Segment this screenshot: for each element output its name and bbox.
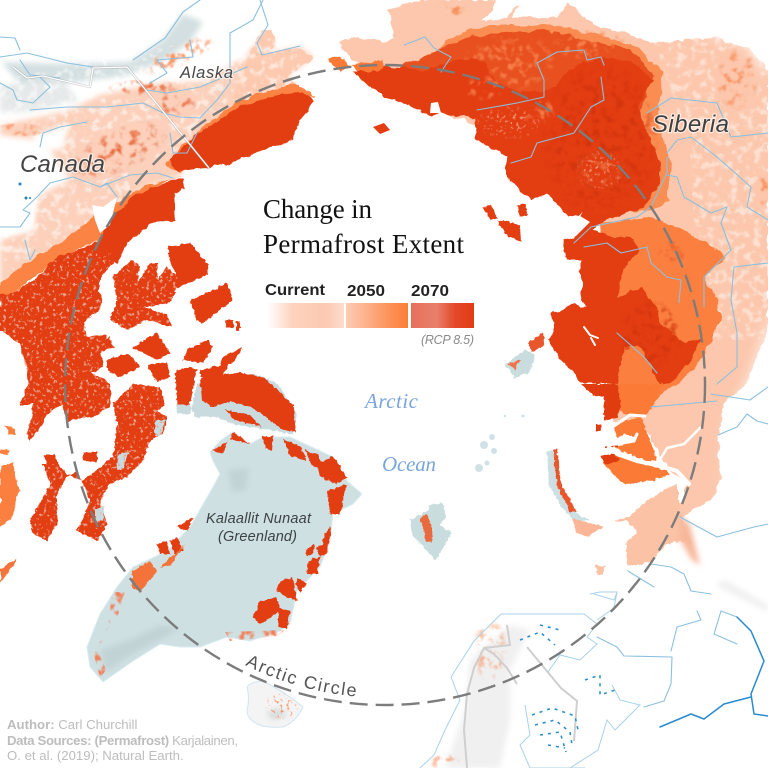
legend swatch: 2070 [411,303,474,328]
north coast red [230,432,250,444]
Siberian rivers [511,77,604,163]
New Siberian Islands [483,204,528,242]
label: Siberia: Siberia [652,111,729,138]
coast and lake lines [420,592,640,768]
map: Iceland [247,681,303,727]
west coast orange [132,545,185,592]
label: Greenland: Kalaallit Nunaat [206,511,312,527]
orange lobe inset at Taimyr [620,346,660,384]
Taimyr white lake [566,216,590,238]
Volga-style dark blue rivers [737,617,768,716]
white gaps on land [0,28,255,235]
credits: Data Sources: (Permafrost) Karjalainen, [7,733,238,748]
legend [265,282,474,347]
small islands [190,283,233,323]
Canadian lakes [18,182,22,186]
national borders [464,625,577,768]
lighter mottled patches in red [474,104,626,192]
orange halo north [425,25,672,215]
red: Kitikmeot mainland [100,178,185,262]
label: Arctic Ocean [363,389,436,476]
Greenland ice sheet [87,432,362,682]
label: Greenland [206,511,312,545]
Arctic Circle dashed line [65,65,705,705]
northeast coast red [317,456,347,484]
credits [7,717,238,763]
title: Change in [263,194,372,224]
map: Scandinavia and NW Russia [420,580,768,768]
legend swatch: 2050 [346,303,408,328]
red: western mainland [0,240,113,442]
title [263,194,464,259]
map: Svalbard and Franz Josef [410,414,524,560]
label: Arctic Ocean: Arctic [363,389,419,413]
Kola and Yamal pale land [595,484,692,575]
southeast coast red [277,577,297,601]
Canada and Alaska rivers [40,122,87,147]
bay notch and island near Chukotka [373,102,441,134]
legend labels: 2070 [411,283,449,300]
orange 2050 lobe [600,217,727,417]
legend labels: Current [265,282,326,299]
map: Canadian Arctic islands [0,243,297,550]
label: Arctic Ocean: Ocean [382,452,436,476]
legend note: (RCP 8.5) [421,333,474,347]
map: North America mainland [0,14,316,442]
legend swatch: current [268,303,344,328]
Canada and Alaska pale current permafrost [0,33,313,290]
red: Beaufort coast [168,92,315,171]
Norway pale permafrost [429,616,508,768]
Siberia pale current permafrost [338,0,768,517]
map: Greenland [87,432,362,682]
orange mottled streaks [0,26,223,196]
label: Arctic Circle: Arctic Circle [245,656,356,696]
map: white Great Bear lake [92,197,117,233]
red main Siberian mass [353,57,702,384]
west coast red [177,517,193,531]
lake clusters [520,625,615,752]
peach streak toward Urals [680,515,700,565]
darker red relief [540,60,684,371]
dark spots upper right [436,0,768,210]
Scandinavian mountains shading [445,580,768,768]
credits: Author: Carl Churchill [7,717,137,732]
mid red northern band [400,30,655,120]
island central group [110,260,180,330]
east coast red [305,544,315,556]
map: Novaya Zemlya [547,449,604,537]
lower orange and red near Ob [581,384,670,484]
red-orange spot [656,240,688,264]
West Russian rivers [651,387,768,407]
southern Baffin mass [30,384,167,541]
Greenland darker ice [100,468,248,672]
credits: O. et al. (2019); Natural Earth. [7,748,184,763]
fine grey speckle on island land [0,250,180,541]
fade on eastern edge [665,0,768,768]
map: Siberia [327,0,768,768]
grey icefields on islands [95,372,297,522]
northern icefield red margins [175,368,197,405]
Chukotka orange [327,55,384,97]
Severnaya Zemlya [505,333,545,378]
map: Labrador fragments [0,426,20,582]
island north cap [168,243,209,288]
title: Permafrost Extent [263,229,464,259]
legend labels [265,282,449,300]
label: Greenland: (Greenland) [218,529,297,545]
label: Alaska: Alaska [179,64,233,82]
label: Canada: Canada [20,151,105,178]
Alaska coast tangle [0,37,93,67]
Alaska grey highlands [0,14,203,112]
border: Alaska-Canada [13,67,209,168]
legend labels: 2050 [347,283,385,300]
white gulfs [584,327,700,484]
southwest coast specks [94,592,285,678]
